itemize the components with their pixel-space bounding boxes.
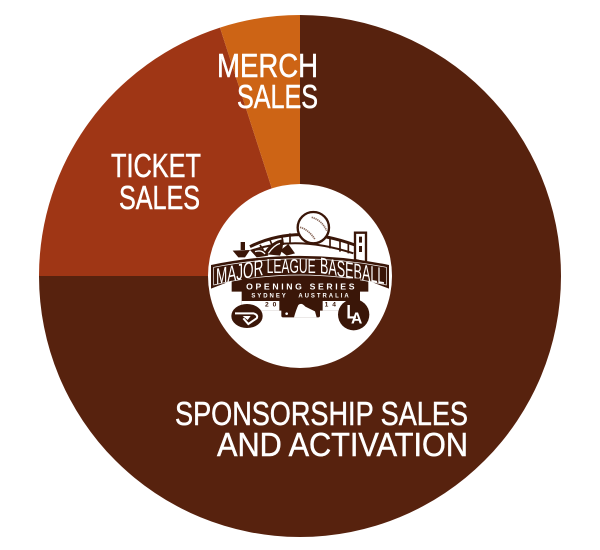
panel: opening series text: SYDNEY AUSTRALIA [251, 294, 349, 300]
center circle [208, 184, 392, 368]
icon: Los Angeles Dodgers logo: L [346, 302, 356, 323]
icon: baseball [298, 212, 329, 243]
icon: Los Angeles Dodgers logo: A [351, 310, 363, 327]
label: merch sales [217, 47, 318, 115]
panel: opening series text: OPENING SERIES [246, 282, 355, 292]
label: ticket sales: TICKET [111, 147, 201, 184]
icon: Arizona Diamondbacks logo [231, 304, 263, 328]
banner: major league baseball: BASEBALL [320, 252, 384, 289]
icon: Los Angeles Dodgers logo [338, 299, 369, 330]
logo: MLB Opening Series Sydney 2014 [211, 212, 389, 330]
banner: major league baseball: MAJOR [216, 254, 263, 289]
banner: major league baseball: LEAGUE [267, 255, 316, 278]
label: merch sales: MERCH [217, 47, 318, 84]
label: ticket sales [111, 147, 201, 216]
label: ticket sales: SALES [119, 179, 200, 216]
panel: opening series text: 14 [325, 302, 336, 309]
pie slice: ticket sales [39, 28, 300, 276]
panel: opening series text: 20 [265, 302, 277, 309]
icon: MLB batter logo [281, 301, 320, 317]
icon: harbour bridge and opera house [233, 233, 366, 263]
label: sponsorship sales and activation [175, 395, 468, 463]
panel: opening series text [242, 278, 360, 311]
label: sponsorship sales and activation: SPONSORSHIP SALES [175, 395, 468, 432]
pie slice: merch sales [220, 15, 300, 276]
banner: major league baseball [211, 252, 389, 292]
label: sponsorship sales and activation: AND ACTIVATION [217, 426, 468, 463]
label: merch sales: SALES [237, 78, 318, 115]
